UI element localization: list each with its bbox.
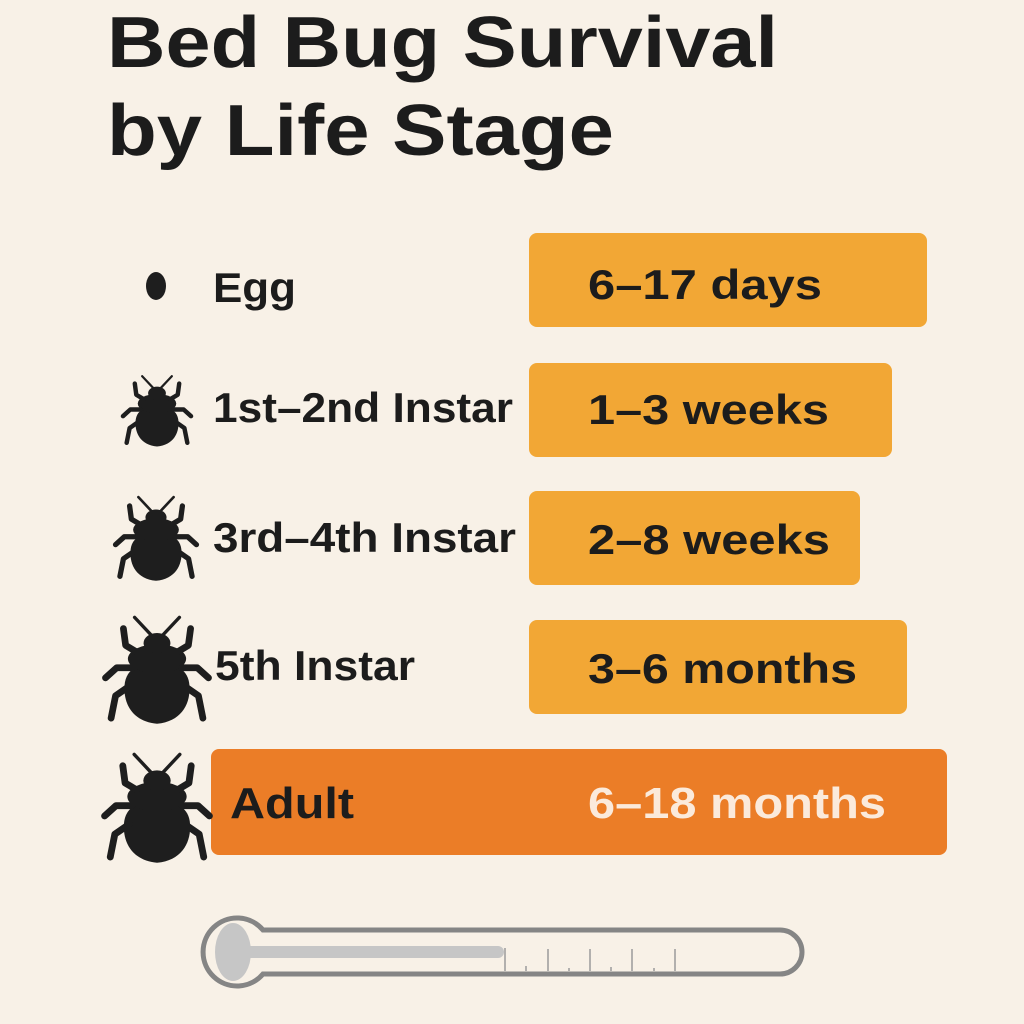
title: by Life Stage: [107, 91, 614, 171]
icon: small bug: [123, 376, 191, 447]
icon: egg: [146, 272, 166, 300]
icon: adult bug: [105, 754, 209, 863]
row: 5th instar: 5th Instar: [215, 642, 415, 689]
row: adult: 6–18 months: [588, 779, 886, 828]
row: 1st-2nd instar: 1st–2nd Instar: [213, 384, 513, 431]
icon: large bug: [105, 617, 209, 724]
row: 5th instar: [105, 617, 907, 724]
title: [107, 3, 778, 171]
row: adult: [105, 749, 947, 863]
row: egg: 6–17 days: [588, 261, 822, 308]
row: 3rd-4th instar: 2–8 weeks: [588, 516, 830, 563]
icon: medium bug: [116, 497, 196, 581]
row: 5th instar: 3–6 months: [588, 645, 857, 692]
row: 1st-2nd instar: [123, 363, 892, 457]
row: 1st-2nd instar: 1–3 weeks: [588, 386, 829, 433]
row: egg: Egg: [213, 264, 296, 311]
row: adult: Adult: [230, 779, 354, 828]
row: 3rd-4th instar: 3rd–4th Instar: [213, 514, 516, 561]
icon: thermometer: [203, 918, 802, 986]
row: 3rd-4th instar: [116, 491, 860, 585]
row: egg: [146, 233, 927, 327]
title: Bed Bug Survival: [107, 3, 778, 83]
